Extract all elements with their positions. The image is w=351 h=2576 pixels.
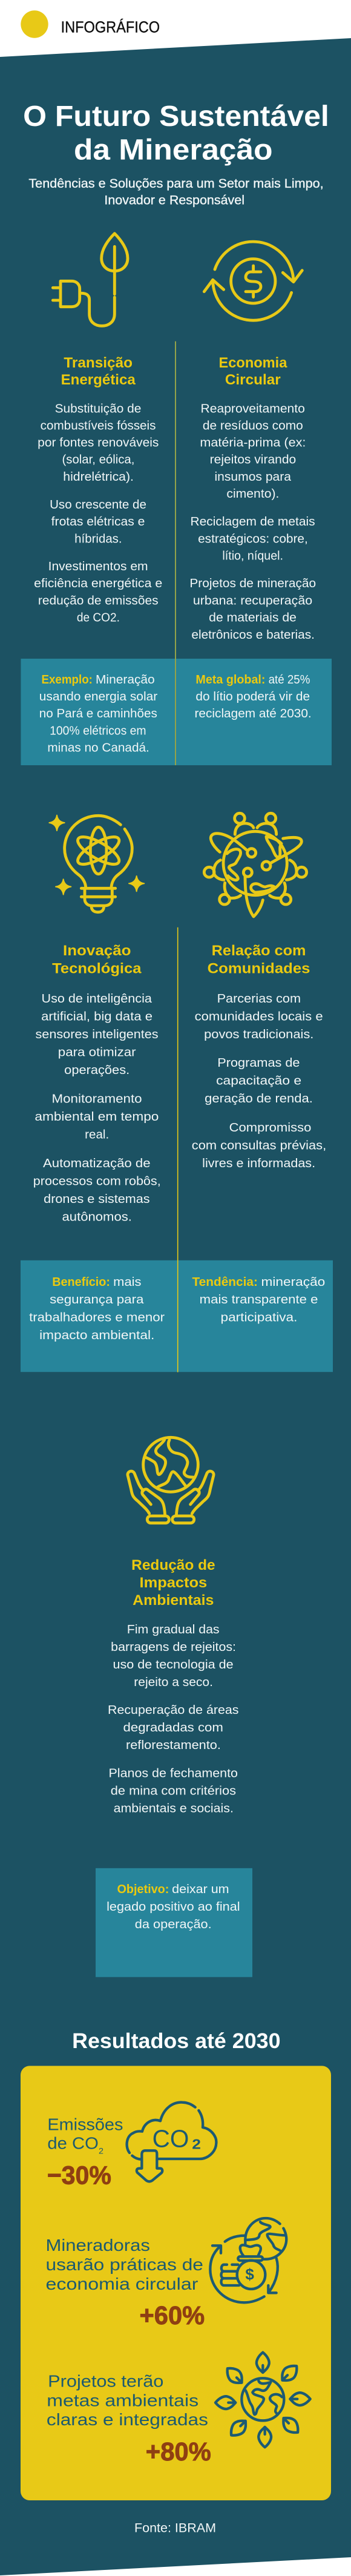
body text: de resíduos como [203, 420, 303, 433]
body text: rejeitos virando [210, 453, 296, 467]
heading: Transição [64, 355, 133, 371]
callout: exemplo [39, 673, 158, 754]
panel: Relação com Comunidades [192, 943, 326, 1325]
heading: Circular [225, 372, 281, 388]
body text: comunidades locais e [195, 1010, 323, 1023]
body text: barragens de rejeitos: [111, 1641, 236, 1654]
body text [108, 1623, 238, 1815]
tag label: INFOGRÁFICO [61, 18, 160, 36]
result: metas ambientais: Projetos terão [48, 2372, 163, 2390]
result: metas ambientais: claras e integradas [47, 2410, 208, 2429]
heading: Redução de [131, 1557, 215, 1573]
body text: reflorestamento. [126, 1739, 221, 1752]
body text: de mina com critérios [111, 1784, 236, 1797]
callout: tendência: mais transparente e [200, 1293, 318, 1306]
subtitle: Inovador e Responsável [104, 194, 244, 207]
body text: autônomos. [62, 1211, 132, 1224]
panel: resultados [21, 2066, 331, 2500]
result: emissões: de CO [47, 2134, 99, 2153]
body text: Automatização de [43, 1157, 151, 1170]
heading: Impactos [139, 1575, 207, 1591]
icon: earth with leaves [215, 2353, 310, 2447]
callout: exemplo: 100% elétricos em [50, 724, 146, 737]
icon: money bag and globe [210, 2218, 286, 2302]
callout: exemplo: minas no Canadá. [47, 741, 149, 754]
heading: Inovação [63, 943, 131, 959]
subtitle [28, 177, 324, 207]
result: metas ambientais [47, 2372, 211, 2466]
body text: Uso de inteligência [41, 992, 153, 1006]
body text: geração de renda. [205, 1092, 313, 1105]
title: O Futuro Sustentável [23, 100, 329, 133]
title [23, 100, 329, 166]
body text: (solar, eólica, [62, 453, 134, 467]
body text: Monitoramento [52, 1092, 142, 1105]
icon: money bag and globe: $ [245, 2265, 254, 2284]
icon: CO2 cloud: CO [153, 2125, 189, 2153]
icon: globe with community [204, 813, 307, 917]
result: emissões [47, 2115, 123, 2190]
body text: frotas elétricas e [51, 515, 145, 529]
callout: objetivo: deixar um [172, 1883, 229, 1896]
result: economia circular: economia circular [46, 2275, 198, 2293]
body text: rejeito a seco. [134, 1676, 213, 1689]
result: economia circular [46, 2236, 205, 2330]
result: economia circular: usarão práticas de [46, 2255, 203, 2274]
body text [192, 992, 326, 1170]
body text: real. [85, 1128, 109, 1141]
heading [219, 355, 287, 388]
body text: ambientais e sociais. [114, 1802, 234, 1815]
callout: meta global [195, 673, 312, 720]
callout: objetivo: da operação. [135, 1918, 212, 1931]
body text: Uso crescente de [50, 498, 146, 512]
body text: eletrônicos e baterias. [191, 628, 315, 642]
heading: Energética [61, 372, 136, 388]
body text [34, 403, 162, 625]
body text: Projetos de mineração [189, 577, 316, 590]
panel: Redução de Impactos Ambientais [96, 1557, 252, 1977]
body text: lítio, níquel. [222, 550, 283, 563]
body text: de materiais de [209, 611, 297, 625]
heading: Resultados até 2030: Resultados até 2030 [72, 2029, 281, 2053]
panel: Inovação Tecnológica [29, 943, 165, 1342]
callout: benefício: mais [113, 1276, 142, 1289]
icon: light bulb with atom [49, 815, 144, 912]
body text: drones e sistemas [44, 1193, 150, 1206]
body text [189, 403, 316, 642]
result: metas ambientais: +80% [146, 2437, 211, 2466]
body text: povos tradicionais. [204, 1028, 313, 1041]
body text: Planos de fechamento [109, 1767, 238, 1780]
callout: exemplo: Exemplo: [41, 673, 93, 687]
body text: cimento). [226, 487, 279, 501]
heading [61, 355, 136, 388]
body text: combustíveis fósseis [41, 420, 156, 433]
result: metas ambientais: metas ambientais [47, 2391, 198, 2410]
body text: Reciclagem de metais [190, 515, 315, 529]
body text: operações. [64, 1064, 130, 1077]
body text: Parcerias com [217, 992, 301, 1006]
callout: exemplo: usando energia solar [39, 690, 158, 703]
header tag [21, 10, 160, 38]
yellow circle [21, 10, 48, 38]
body text: para otimizar [58, 1046, 136, 1059]
callout: meta global: do lítio poderá vir de [195, 690, 310, 703]
body text: insumos para [214, 470, 292, 484]
body text: Compromisso [229, 1121, 311, 1135]
divider line 2 [177, 927, 179, 1372]
body text: processos com robôs, [33, 1175, 161, 1188]
body text [33, 992, 161, 1224]
callout: benefício: trabalhadores e menor [29, 1311, 165, 1325]
heading: Ambientais [133, 1592, 214, 1609]
callout: meta global: Meta global: [195, 673, 265, 687]
body text: com consultas prévias, [192, 1139, 326, 1152]
heading: Relação com [212, 943, 306, 959]
body text: Reaproveitamento [201, 403, 305, 416]
body text: Substituição de [55, 403, 141, 416]
body text: urbana: recuperação [193, 595, 312, 608]
body text: híbridas. [74, 533, 122, 546]
icon: CO2 cloud: 2 [192, 2136, 201, 2152]
callout: exemplo: Mineração [96, 673, 155, 687]
body text: capacitação e [216, 1075, 301, 1088]
body text: uso de tecnologia de [113, 1658, 234, 1672]
body text: estratégicos: cobre, [198, 533, 308, 546]
body text: Fim gradual das [127, 1623, 220, 1636]
callout: objetivo [96, 1868, 252, 1977]
icon: CO2 cloud [127, 2103, 216, 2181]
body text: matéria-prima (ex: [200, 436, 306, 450]
callout: benefício: segurança para [50, 1293, 144, 1306]
callout: exemplo: no Pará e caminhões [39, 707, 157, 720]
icon: circular economy dollar [204, 242, 302, 320]
callout: benefício: Benefício: [52, 1276, 110, 1289]
heading: Comunidades [208, 961, 310, 977]
heading [131, 1557, 215, 1609]
body text: eficiência energética e [34, 577, 162, 590]
source: Fonte: IBRAM [134, 2521, 216, 2535]
body text: redução de emissões [38, 595, 159, 608]
body text: degradadas com [123, 1721, 223, 1734]
callout: objetivo: Objetivo: [117, 1883, 169, 1896]
callout: meta global: até 25% [269, 673, 310, 687]
divider line 1 [175, 341, 176, 765]
heading [52, 943, 142, 977]
heading [208, 943, 310, 977]
result: economia circular: +60% [139, 2301, 205, 2330]
body text: livres e informadas. [202, 1157, 315, 1170]
icon: hands holding globe [128, 1437, 214, 1523]
body text: artificial, big data e [41, 1010, 153, 1023]
result: emissões: −30% [47, 2161, 111, 2190]
panel: Transição Energética [34, 355, 162, 754]
body text: Programas de [217, 1056, 300, 1070]
callout: tendência [192, 1276, 325, 1325]
callout: tendência: Tendência: [192, 1276, 258, 1289]
callout: tendência: participativa. [220, 1311, 297, 1325]
body text: por fontes renováveis [38, 436, 159, 450]
result: economia circular: Mineradoras [46, 2236, 150, 2255]
subtitle: Tendências e Soluções para um Setor mais Limpo, [28, 177, 324, 191]
heading: Tecnológica [52, 961, 142, 977]
callout: benefício: impacto ambiental. [39, 1329, 154, 1342]
panel: Economia Circular [189, 355, 316, 720]
body text: hidrelétrica). [63, 470, 134, 484]
body text: de CO2. [77, 611, 120, 625]
result: emissões: Emissões [47, 2115, 123, 2133]
callout: objetivo: legado positivo ao final [107, 1900, 240, 1914]
callout: benefício [29, 1276, 165, 1342]
callout band 1 [21, 659, 332, 765]
body text: Recuperação de áreas [108, 1704, 238, 1717]
callout: meta global: reciclagem até 2030. [195, 707, 312, 720]
body text: Investimentos em [48, 560, 148, 573]
callout band 2 [21, 1260, 333, 1372]
callout: tendência: mineração [261, 1276, 325, 1289]
body text: ambiental em tempo [34, 1110, 159, 1124]
heading: Economia [219, 355, 287, 371]
body text: sensores inteligentes [35, 1028, 159, 1041]
icon: leaf with plug [53, 234, 128, 326]
title: da Mineração [74, 134, 272, 166]
result: emissões: 2 [99, 2146, 103, 2155]
